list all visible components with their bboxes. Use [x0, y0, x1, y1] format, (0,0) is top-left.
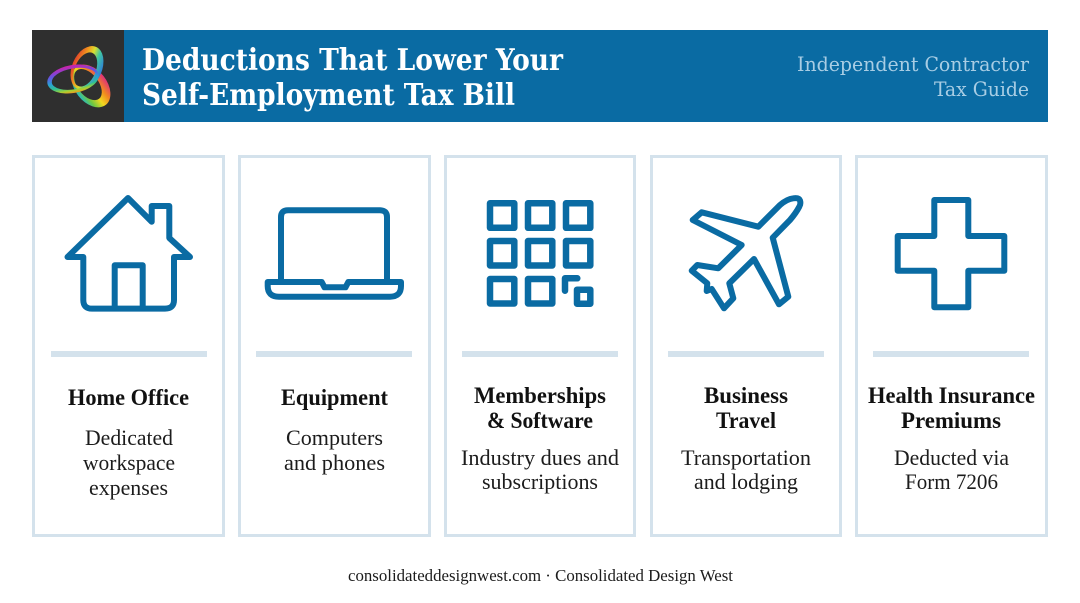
icon: medical cross	[898, 200, 1004, 307]
heading: business travel: Business	[704, 383, 788, 408]
icon: app grid	[490, 203, 590, 304]
subtitle: Tax Guide	[934, 77, 1029, 101]
icon: tri-loop rainbow logo	[45, 41, 118, 115]
title: Deductions That Lower Your	[142, 43, 564, 78]
text: equipment description: and phones	[284, 450, 385, 475]
heading: business travel	[704, 383, 788, 433]
icon: house	[68, 198, 190, 309]
text: equipment description: Computers	[286, 425, 383, 450]
text: health insurance description	[894, 445, 1009, 494]
panel: home office	[34, 156, 224, 536]
heading: health insurance premiums: Premiums	[901, 408, 1001, 433]
text: business travel description: and lodging	[694, 469, 798, 494]
heading: health insurance premiums	[868, 383, 1035, 433]
logo tile	[32, 30, 124, 122]
heading: memberships and software	[474, 383, 606, 433]
panel: business travel	[652, 156, 840, 536]
text: home office description	[83, 425, 175, 500]
icon: airplane	[692, 198, 800, 308]
text: home office description: Dedicated	[85, 425, 173, 450]
panel: health insurance premiums	[856, 156, 1046, 536]
heading: memberships and software: Memberships	[474, 383, 606, 408]
title: Self-Employment Tax Bill	[142, 78, 515, 113]
text: health insurance description: Deducted via	[894, 445, 1009, 470]
footer: consolidateddesignwest.com · Consolidated Design West	[348, 566, 733, 585]
text: memberships description	[461, 445, 619, 494]
text: memberships description: subscriptions	[482, 469, 598, 494]
icon: laptop	[268, 210, 401, 297]
heading: memberships and software: & Software	[487, 408, 593, 433]
text: memberships description: Industry dues and	[461, 445, 619, 470]
text: health insurance description: Form 7206	[905, 469, 998, 494]
text: equipment description	[284, 425, 385, 475]
subtitle: Independent Contractor	[797, 52, 1029, 76]
text: business travel description: Transportation	[681, 445, 811, 470]
panel: memberships and software	[446, 156, 634, 536]
title	[142, 43, 564, 113]
heading: equipment: Equipment	[281, 385, 388, 410]
panel: equipment	[240, 156, 430, 536]
header banner	[32, 30, 1048, 122]
heading: health insurance premiums: Health Insurance	[868, 383, 1035, 408]
heading: home office: Home Office	[68, 385, 189, 410]
subtitle	[797, 52, 1029, 101]
text: home office description: expenses	[89, 475, 168, 500]
text: business travel description	[681, 445, 811, 494]
heading: business travel: Travel	[716, 408, 776, 433]
text: home office description: workspace	[83, 450, 175, 475]
